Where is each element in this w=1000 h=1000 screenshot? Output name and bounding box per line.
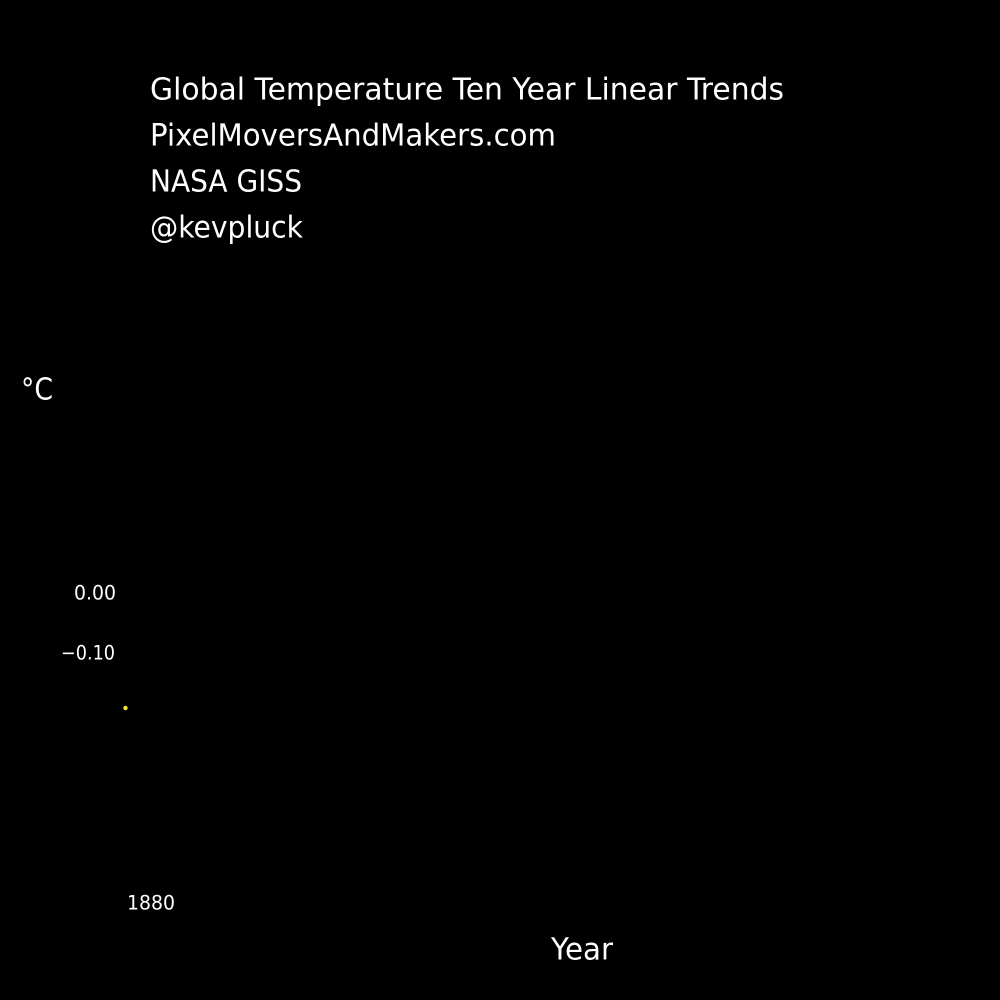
y axis tick labels: 0.00 xyxy=(74,582,116,604)
title block: NASA GISS xyxy=(150,164,302,200)
x axis label: Year xyxy=(550,932,614,968)
title block: @kevpluck xyxy=(150,210,304,246)
y axis tick labels: −0.10 xyxy=(61,642,115,664)
title block: PixelMoversAndMakers.com xyxy=(150,118,556,154)
title block xyxy=(150,72,784,246)
x axis tick label: 1880 xyxy=(127,892,175,914)
data point xyxy=(123,706,128,710)
y axis tick labels xyxy=(61,582,116,664)
y axis label: °C xyxy=(21,372,53,408)
title block: Global Temperature Ten Year Linear Trends xyxy=(150,72,784,108)
